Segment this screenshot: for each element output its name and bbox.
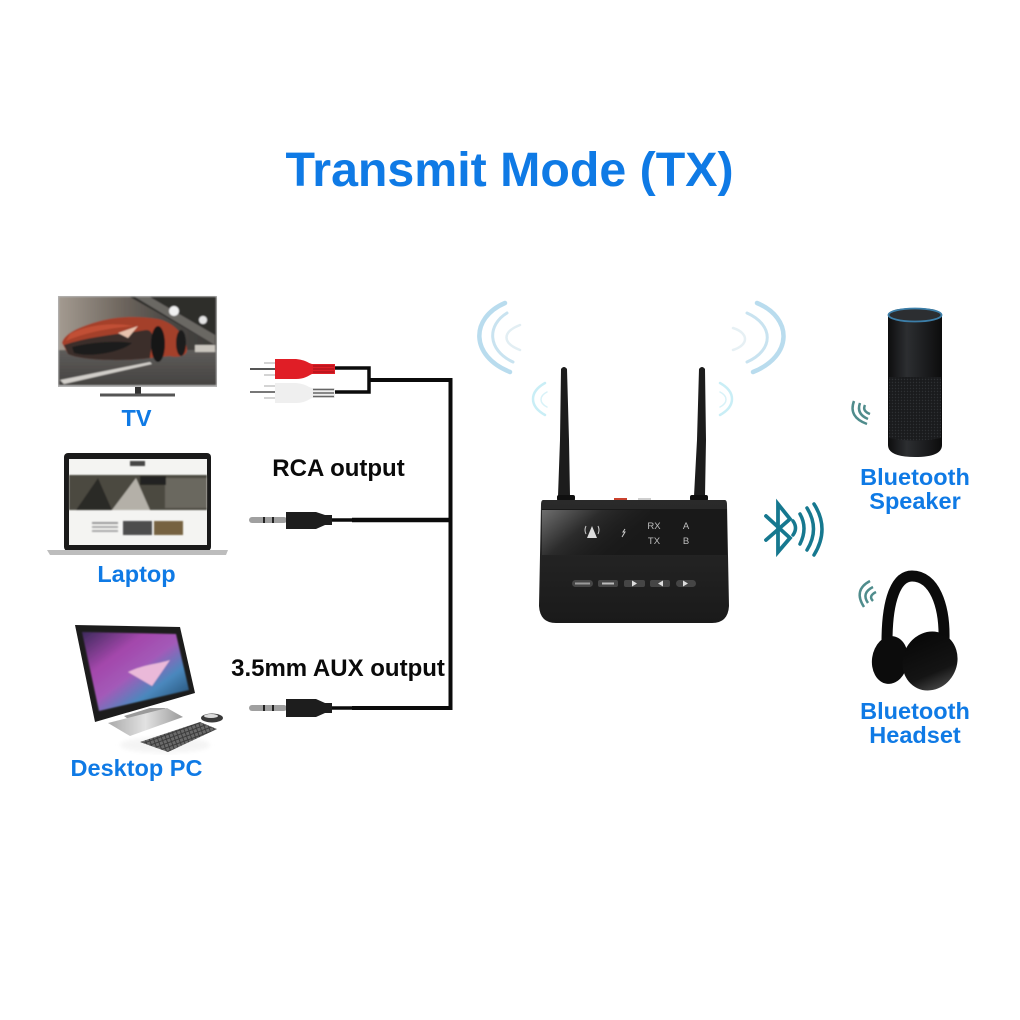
label: desktop PC: Desktop PC [71,755,202,781]
antenna right [694,367,706,496]
icon: desktop PC [75,625,223,753]
icon: laptop 3.5mm jack [249,512,332,529]
cable network [330,368,450,708]
icon: signal waves left [479,303,547,415]
speaker waves [853,401,870,424]
buttons [572,580,696,587]
LED labels [647,521,690,547]
label: Bluetooth Headset: Headset [869,722,961,748]
title: Transmit Mode (TX) [285,143,734,197]
LED labels: TX [648,536,661,547]
icon: RCA plugs [250,359,335,403]
label: Bluetooth Speaker: Speaker [869,488,961,514]
LED icons [585,526,625,538]
label: Bluetooth Speaker: Bluetooth [860,464,970,490]
label: laptop: Laptop [97,561,176,587]
icon: TV [58,296,217,396]
device: Bluetooth transmitter [539,367,729,623]
label: 3.5mm AUX output: 3.5mm AUX output [231,655,445,682]
icon: signal waves right [720,303,784,415]
label: TV: TV [121,405,152,431]
icon: Bluetooth speaker [853,308,942,457]
antenna left [558,367,570,496]
icon: desktop 3.5mm jack [249,699,332,717]
label: RCA output: RCA output [272,455,405,482]
LED labels: RX [647,521,661,532]
LED labels: B [683,536,689,547]
label: Bluetooth Headset: Bluetooth [860,698,970,724]
icon: laptop [47,453,228,555]
headset waves [860,581,876,607]
icon: Bluetooth symbol [766,504,822,555]
icon: Bluetooth headset [860,576,967,700]
LED labels: A [683,521,690,532]
